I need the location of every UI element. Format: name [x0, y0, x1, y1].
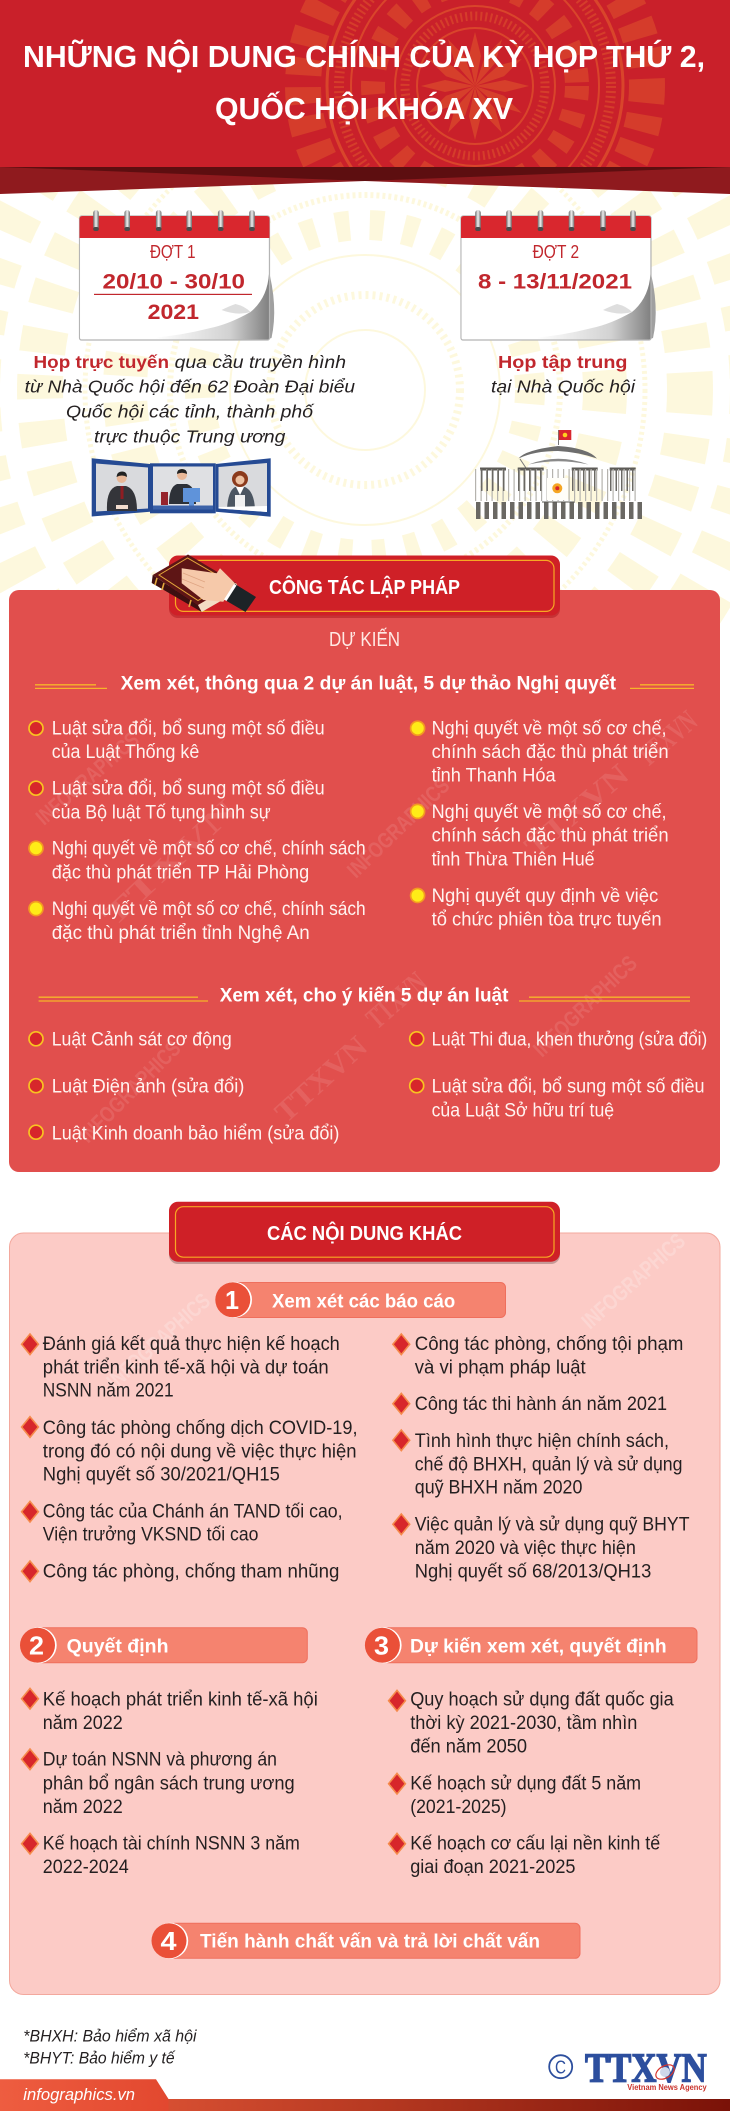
footnotes: *BHYT: Bảo hiểm y tế — [23, 2048, 176, 2067]
list: section 3: thời kỳ 2021-2030, tầm nhìn — [410, 1713, 637, 1734]
list: section 2 — [22, 1688, 318, 1878]
list: left column, group 1 — [29, 718, 366, 944]
list: section 1 right: Công tác thi hành án năm 2021 — [415, 1394, 667, 1415]
title: NHỮNG NỘI DUNG CHÍNH CỦA KỲ HỌP THỨ 2, — [23, 38, 705, 74]
list: left column, group 2: Luật Kinh doanh bảo hiểm (sửa đổi) — [52, 1124, 339, 1145]
list: section 1 right — [393, 1334, 690, 1582]
section 4 pill: Tiến hành chất vấn và trả lời chất vấn — [200, 1931, 540, 1953]
text: online session: Họp trực tuyến — [34, 352, 169, 372]
list: section 2: phân bổ ngân sách trung ương — [43, 1774, 295, 1795]
background: pale drum pattern — [0, 184, 730, 624]
list: section 1 left: Công tác phòng chống dịch COVID-19, — [43, 1418, 358, 1439]
list: section 2: năm 2022 — [43, 1797, 123, 1818]
list: section 2: năm 2022 — [43, 1713, 123, 1734]
calendar: đợt 1: ĐỢT 1 — [150, 242, 196, 262]
list: right column, group 1 — [411, 718, 669, 931]
text: online session: Quốc hội các tỉnh, thành phố — [66, 401, 314, 421]
heading plate: legislative work: CÔNG TÁC LẬP PHÁP — [269, 575, 460, 599]
section 3 pill: 3 — [374, 1630, 389, 1660]
logo: TTXVN: C — [555, 2058, 566, 2078]
watermarks: TTXVN — [518, 757, 636, 863]
list: right column, group 1: Nghị quyết về một số cơ chế, — [432, 802, 667, 823]
list: right column, group 1: chính sách đặc thù phát triển — [432, 742, 669, 763]
heading plate: other content: CÁC NỘI DUNG KHÁC — [267, 1221, 462, 1245]
footer bar: infographics.vn — [23, 2085, 135, 2104]
list: section 1 right: năm 2020 và việc thực hiện — [415, 1538, 636, 1559]
list: section 1 right: Nghị quyết số 68/2013/QH13 — [415, 1561, 651, 1582]
calendar: đợt 1 — [80, 210, 274, 340]
watermarks: INFOGRAPHICS — [102, 1288, 215, 1394]
watermarks: INFOGRAPHICS — [342, 773, 454, 883]
panel: legislative work — [9, 554, 720, 1172]
list: left column, group 1: Luật sửa đổi, bổ sung một số điều — [52, 718, 325, 739]
list: section 1 left: phát triển kinh tế-xã hội và dự toán — [43, 1357, 329, 1378]
list: section 1 left: Đánh giá kết quả thực hiện kế hoạch — [43, 1334, 340, 1355]
watermarks: INFOGRAPHICS — [577, 1228, 690, 1334]
watermarks: INFOGRAPHICS — [528, 951, 642, 1062]
list: section 2: Dự toán NSNN và phương án — [43, 1750, 277, 1771]
footer bar — [0, 2079, 730, 2111]
watermarks: TTXVN — [360, 966, 433, 1035]
list: right column, group 2: của Luật Sở hữu trí tuệ — [432, 1100, 614, 1121]
text: in-person session: tại Nhà Quốc hội — [491, 377, 636, 397]
calendar: đợt 2: ĐỢT 2 — [533, 242, 579, 262]
logo: TTXVN: TTXVN — [585, 2045, 707, 2091]
list: left column, group 1: Nghị quyết về một số cơ chế, chính sách — [52, 839, 366, 860]
list: right column, group 1: Nghị quyết về một số cơ chế, — [432, 718, 667, 739]
section 1 pill: 1 — [225, 1285, 239, 1315]
section 4 pill — [152, 1923, 580, 1959]
list: section 1 left: Công tác của Chánh án TAND tối cao, — [43, 1501, 343, 1522]
list: left column, group 1: của Bộ luật Tố tụng hình sự — [52, 802, 271, 823]
calendar: đợt 2: 8 - 13/11/2021 — [478, 271, 632, 294]
heading: review and pass: Xem xét, thông qua 2 dự án luật, 5 dự thảo Nghị quyết — [121, 672, 616, 694]
watermarks — [31, 704, 704, 1148]
list: left column, group 2 — [29, 1030, 339, 1145]
list: left column, group 1: đặc thù phát triển TP Hải Phòng — [52, 862, 309, 883]
logo: TTXVN: Vietnam News Agency — [627, 2082, 707, 2092]
footnotes: *BHXH: Bảo hiểm xã hội — [23, 2026, 198, 2045]
list: section 3: (2021-2025) — [410, 1797, 507, 1818]
list: section 1 left: Công tác phòng, chống tham nhũng — [43, 1561, 339, 1582]
list: right column, group 2: Luật sửa đổi, bổ sung một số điều — [432, 1077, 705, 1098]
calendar: đợt 1: 20/10 - 30/10 — [102, 271, 245, 294]
section 2 pill: 2 — [29, 1630, 44, 1660]
text: online session: từ Nhà Quốc hội đến 62 Đoàn Đại biểu — [25, 377, 355, 397]
text: in-person session — [491, 352, 636, 397]
list: right column, group 1: Nghị quyết quy định về việc — [432, 886, 658, 907]
watermarks: TTXVN — [96, 793, 243, 933]
panel: other content — [10, 1202, 720, 1994]
list: section 1 left: NSNN năm 2021 — [43, 1381, 174, 1402]
section 3 pill: Dự kiến xem xét, quyết định — [410, 1636, 667, 1658]
list: section 1 right: Tình hình thực hiện chính sách, — [415, 1431, 669, 1452]
list: section 2: Kế hoạch phát triển kinh tế-xã hội — [43, 1690, 318, 1711]
list: section 3: đến năm 2050 — [410, 1736, 527, 1757]
section 4 pill: 4 — [160, 1926, 177, 1956]
section 2 pill: Quyết định — [67, 1636, 168, 1658]
icon: video conference — [92, 458, 271, 517]
list: section 2: Kế hoạch tài chính NSNN 3 năm — [43, 1834, 300, 1855]
list: section 1 left: Viện trưởng VKSND tối cao — [43, 1525, 258, 1546]
watermarks: INFOGRAPHICS — [74, 1036, 186, 1148]
section 1 pill — [215, 1282, 506, 1318]
icon: hand on book — [152, 554, 256, 612]
text: online session: trực thuộc Trung ương — [94, 426, 286, 446]
list: right column, group 1: chính sách đặc thù phát triển — [432, 826, 669, 847]
section 2 pill — [20, 1627, 307, 1663]
list: section 2: 2022-2024 — [43, 1857, 129, 1878]
list: section 1 right: chế độ BHXH, quản lý và sử dụng — [415, 1454, 682, 1475]
list: right column, group 1: tỉnh Thanh Hóa — [432, 766, 556, 787]
list: section 3: giai đoạn 2021-2025 — [410, 1857, 576, 1878]
list: section 3 — [389, 1690, 674, 1878]
list: section 1 left: Nghị quyết số 30/2021/QH15 — [43, 1465, 280, 1486]
title — [23, 38, 705, 126]
title: QUỐC HỘI KHÓA XV — [215, 90, 513, 126]
watermarks — [102, 1228, 690, 1394]
header background — [0, 0, 730, 194]
text: online session: qua cầu truyền hình — [175, 352, 346, 372]
section 1 pill: Xem xét các báo cáo — [272, 1291, 455, 1313]
list: left column, group 1: Nghị quyết về một số cơ chế, chính sách — [52, 899, 366, 920]
list: right column, group 2: Luật Thi đua, khen thưởng (sửa đổi) — [432, 1030, 707, 1051]
heading: review and comment: Xem xét, cho ý kiến 5 dự án luật — [220, 985, 509, 1007]
list: section 1 right: Việc quản lý và sử dụng quỹ BHYT — [415, 1515, 690, 1536]
list: left column, group 2: Luật Điện ảnh (sửa đổi) — [52, 1077, 244, 1098]
list: left column, group 1: Luật sửa đổi, bổ sung một số điều — [52, 779, 325, 800]
footnotes — [23, 2026, 198, 2067]
watermarks: TTXVN — [269, 1029, 374, 1129]
list: section 3: Kế hoạch cơ cấu lại nền kinh tế — [410, 1834, 661, 1855]
icon: National Assembly building — [475, 430, 642, 510]
watermarks: TTXVN — [630, 704, 704, 773]
list: section 3: Kế hoạch sử dụng đất 5 năm — [410, 1774, 641, 1795]
logo: TTXVN — [549, 2045, 707, 2092]
list: section 3: Quy hoạch sử dụng đất quốc gia — [410, 1690, 674, 1711]
heading plate: other content — [169, 1202, 560, 1264]
section 3 pill — [365, 1627, 697, 1663]
list: section 1 right: Công tác phòng, chống tội phạm — [415, 1334, 683, 1355]
text: in-person session: Họp tập trung — [498, 352, 628, 372]
list: right column, group 2 — [410, 1030, 707, 1121]
text: online session — [25, 352, 355, 446]
text: du kien: DỰ KIẾN — [329, 628, 400, 651]
list: section 1 right: và vi phạm pháp luật — [415, 1357, 586, 1378]
list: section 1 right: quỹ BHXH năm 2020 — [415, 1478, 582, 1499]
calendar: đợt 2 — [461, 210, 656, 340]
list: right column, group 1: tổ chức phiên tòa trực tuyến — [432, 910, 662, 931]
watermarks: INFOGRAPHICS — [31, 727, 144, 830]
list: left column, group 2: Luật Cảnh sát cơ động — [52, 1030, 232, 1051]
list: left column, group 1: đặc thù phát triển tỉnh Nghệ An — [52, 923, 310, 944]
list: section 1 left: trong đó có nội dung về việc thực hiện — [43, 1441, 357, 1462]
heading: review and comment — [39, 985, 690, 1007]
heading plate: legislative work — [169, 556, 560, 618]
list: section 1 left — [22, 1334, 357, 1582]
list: left column, group 1: của Luật Thống kê — [52, 742, 199, 763]
list: right column, group 1: tỉnh Thừa Thiên Huế — [432, 849, 595, 870]
calendar: đợt 1: 2021 — [148, 301, 199, 324]
